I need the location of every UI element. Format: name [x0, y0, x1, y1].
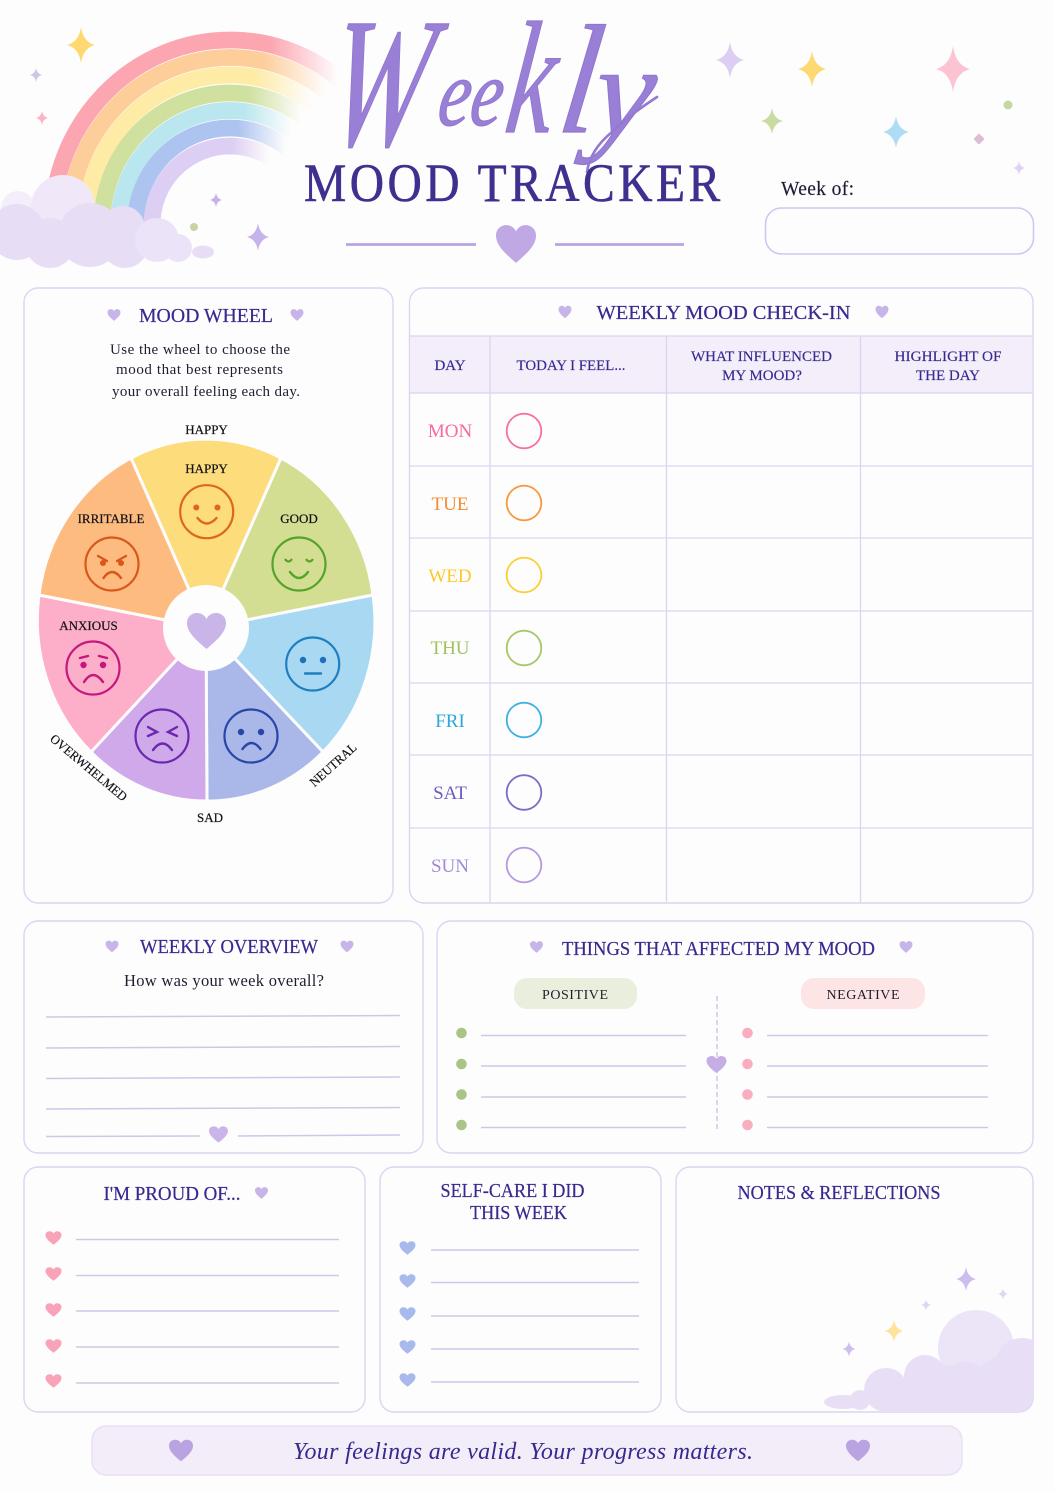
footer banner [92, 1426, 962, 1475]
row: saturday: SAT [433, 783, 467, 804]
wheel labels: SAD [197, 810, 223, 825]
heading: notes and reflections: NOTES & REFLECTIONS [738, 1182, 940, 1204]
positive list [456, 1028, 686, 1130]
panel: things that affected my mood [437, 921, 1033, 1153]
wheel instructions: Use the wheel to choose the [110, 342, 290, 358]
week of label: Week of: [781, 179, 854, 200]
face: anxious [66, 642, 120, 694]
heading: self-care: SELF-CARE I DID [440, 1180, 584, 1202]
heading: things that affected my mood: THINGS THAT AFFECTED MY MOOD [562, 938, 875, 960]
table grid [410, 336, 1033, 903]
heading: I'm proud of: I'M PROUD OF... [104, 1183, 240, 1205]
wheel labels: NEUTRAL [306, 740, 360, 790]
heading: self-care [440, 1180, 584, 1224]
table column headers [434, 349, 1002, 384]
positive pill: POSITIVE [542, 988, 608, 1003]
illustration: moon and clouds [824, 1310, 1033, 1412]
notes sparkles [842, 1267, 1008, 1356]
week of input box [766, 208, 1034, 254]
overview prompt: How was your week overall? [124, 971, 324, 990]
icon: footer heart left [169, 1440, 193, 1461]
center divider with heart [706, 996, 726, 1132]
footer message: Your feelings are valid. Your progress matters. [293, 1439, 753, 1465]
row: sunday [431, 848, 541, 882]
icon: center heart [187, 613, 226, 649]
face: neutral [286, 638, 339, 690]
row: monday [428, 414, 541, 448]
row: friday: FRI [435, 711, 465, 732]
wheel labels: OVERWHELMED [47, 731, 130, 804]
row: tuesday [432, 486, 541, 520]
wheel labels [47, 422, 360, 825]
wheel labels: HAPPY [185, 422, 228, 437]
panel: self-care [380, 1167, 661, 1412]
negative pill: NEGATIVE [826, 988, 900, 1003]
cloud under rainbow [0, 175, 214, 268]
table column headers: WHAT INFLUENCED [691, 349, 832, 365]
table column headers: TODAY I FEEL... [516, 358, 626, 374]
face: overwhelmed [136, 710, 188, 762]
row: saturday [433, 775, 541, 810]
heading: mood wheel: MOOD WHEEL [139, 305, 273, 327]
self-care list [400, 1241, 639, 1387]
left sparkles [30, 27, 269, 251]
title flourish [587, 97, 657, 172]
icon: overview heart [209, 1126, 228, 1143]
panel: weekly overview [24, 921, 423, 1153]
overview writing lines [46, 1016, 400, 1136]
row: thursday: THU [430, 638, 470, 659]
title: Weekly [317, 0, 671, 186]
face: happy [180, 485, 233, 538]
right sparkles [716, 42, 1025, 175]
wheel instructions: mood that best represents [116, 362, 283, 378]
wheel labels: IRRITABLE [78, 511, 144, 526]
title: Weekly: y [573, 19, 666, 165]
wheel labels: GOOD [280, 511, 318, 526]
heading: self-care: THIS WEEK [470, 1202, 567, 1224]
table column headers: MY MOOD? [722, 368, 802, 384]
rainbow illustration [52, 40, 376, 225]
title: Weekly: ee [433, 40, 512, 146]
table column headers: THE DAY [916, 368, 980, 384]
panel: mood wheel [24, 288, 393, 903]
mood wheel chart [37, 422, 375, 825]
wheel instructions [110, 342, 300, 400]
panel: I'm proud of [24, 1167, 365, 1412]
table header band [410, 336, 1032, 393]
row: monday: MON [428, 421, 472, 442]
face: sad [224, 710, 278, 762]
row: friday [435, 703, 541, 737]
title: Mood Tracker: MOOD TRACKER [304, 154, 720, 214]
icon: footer heart right [846, 1440, 870, 1461]
face: good [272, 538, 326, 590]
row: sunday: SUN [431, 856, 469, 877]
positive pill [514, 978, 637, 1009]
negative list [742, 1028, 988, 1130]
face: irritable [86, 538, 138, 590]
title divider with heart [346, 225, 684, 263]
table column headers: HIGHLIGHT OF [894, 349, 1002, 365]
row: wednesday [428, 558, 541, 592]
panel: notes and reflections [676, 1167, 1049, 1420]
proud list [46, 1231, 339, 1388]
negative pill [801, 978, 925, 1009]
row: tuesday: TUE [432, 494, 468, 515]
wheel instructions: your overall feeling each day. [112, 384, 300, 400]
table column headers: DAY [434, 358, 466, 374]
row: wednesday: WED [428, 566, 472, 587]
heading: mood wheel [108, 305, 304, 327]
row: thursday [430, 631, 541, 665]
wheel labels: ANXIOUS [59, 618, 118, 633]
panel: weekly mood check-in [410, 288, 1033, 903]
heading: weekly mood check-in: WEEKLY MOOD CHECK-IN [596, 302, 850, 324]
heading: weekly overview: WEEKLY OVERVIEW [140, 936, 318, 958]
wheel labels: HAPPY [185, 461, 228, 476]
